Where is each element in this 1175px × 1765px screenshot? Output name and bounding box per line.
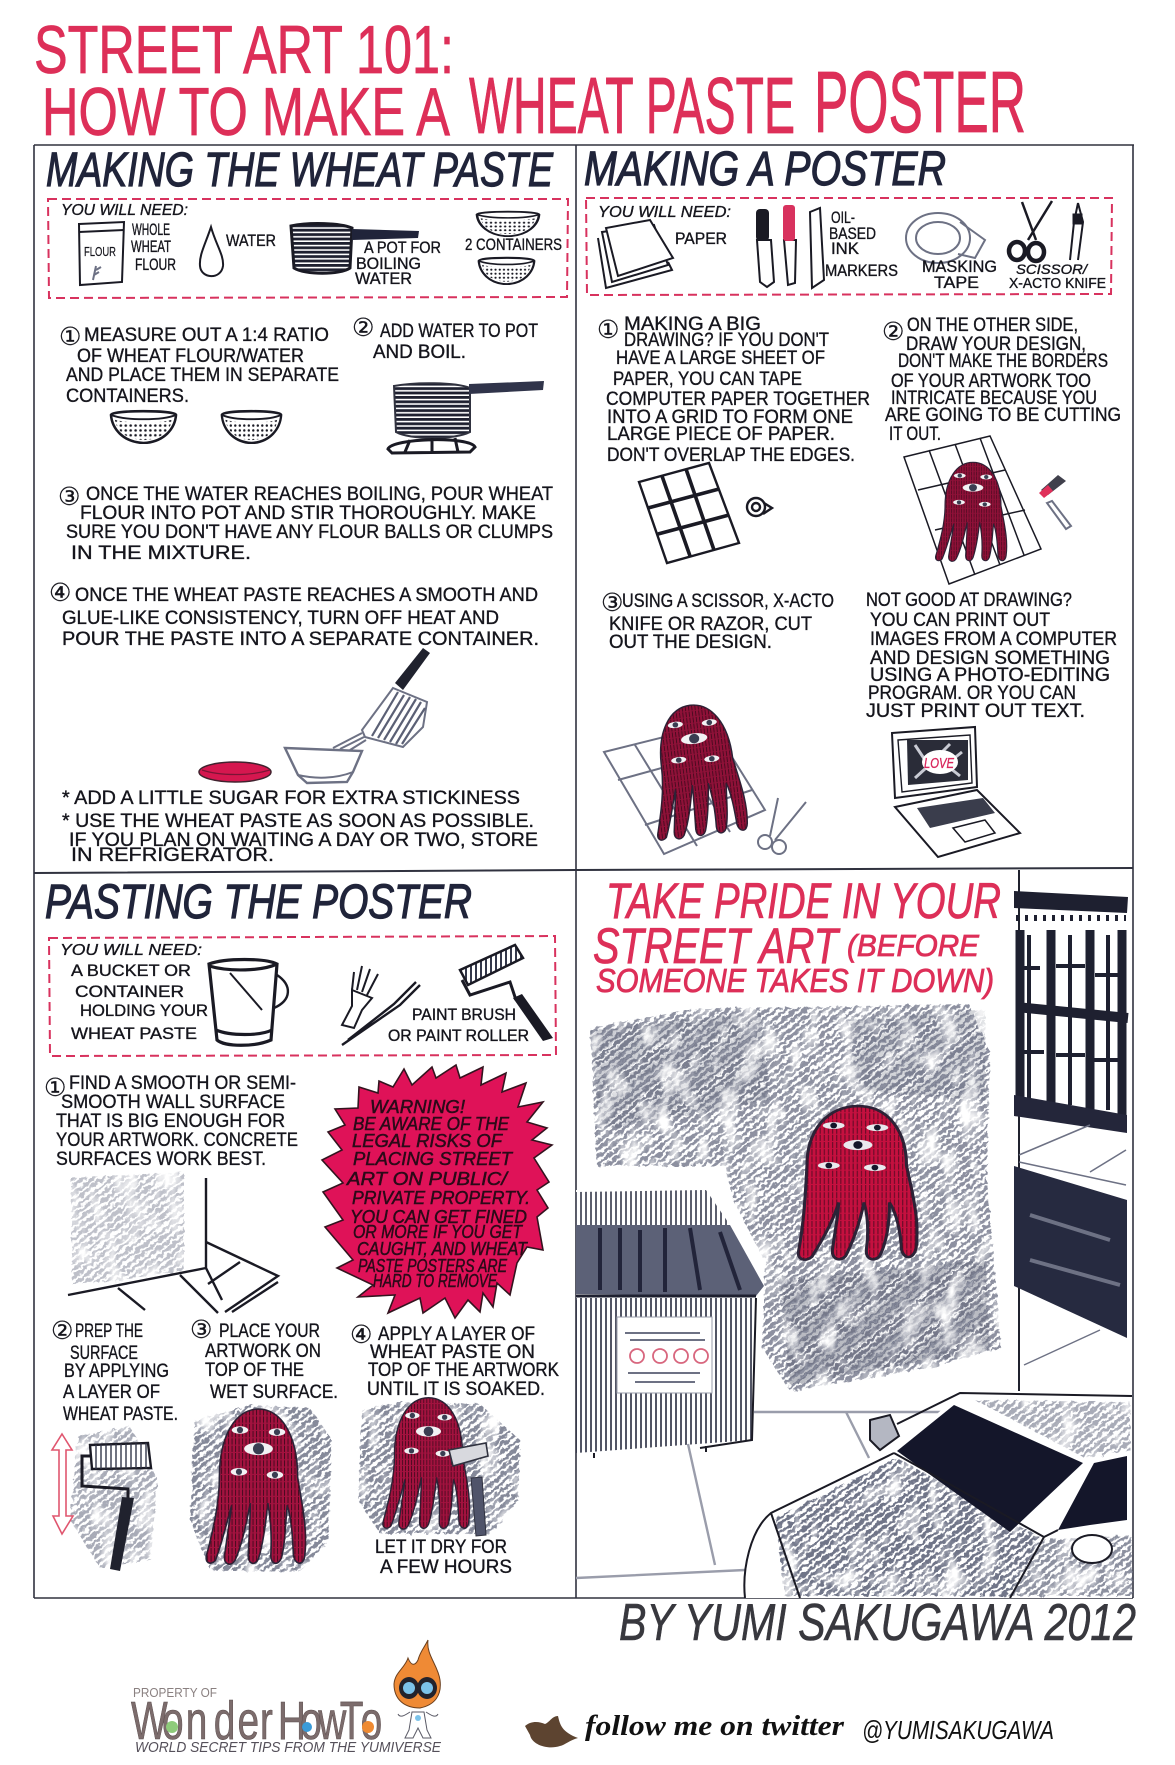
- step 2 poster: ②: [882, 317, 904, 346]
- step 3 pasting: ③: [190, 1315, 212, 1344]
- supplies box: poster: SCISSOR/: [1016, 261, 1089, 277]
- logo: wonderhowto: [131, 1640, 442, 1756]
- supplies box: poster: X-ACTO KNIFE: [1009, 275, 1106, 292]
- street octopus poster: [798, 1106, 917, 1260]
- icon: paper: [598, 220, 673, 288]
- warning starburst: OR MORE IF YOU GET: [353, 1221, 523, 1242]
- supplies box: pasting: HOLDING YOUR: [80, 1002, 208, 1020]
- illustration: design on grid: [904, 436, 1071, 584]
- step 1 poster: COMPUTER PAPER TOGETHER: [606, 389, 870, 410]
- illustration: wall corner: [68, 1172, 278, 1313]
- step 4: ④: [49, 578, 71, 607]
- street lines: [576, 1412, 1000, 1578]
- title: WHEAT PASTE: [469, 61, 795, 150]
- heading: making a poster: MAKING A POSTER: [584, 143, 946, 196]
- warning starburst: CAUGHT, AND WHEAT: [357, 1238, 528, 1259]
- tip: not good at drawing: [866, 590, 1117, 857]
- warning starburst: ART ON PUBLIC/: [346, 1168, 509, 1189]
- heading: take pride in your street art: STREET ART: [593, 918, 841, 974]
- step 2: ②: [352, 313, 374, 342]
- step 1: MEASURE OUT A 1:4 RATIO: [84, 325, 329, 346]
- notes: IN REFRIGERATOR.: [71, 845, 274, 866]
- heading: pasting the poster: PASTING THE POSTER: [45, 876, 472, 929]
- logo: wonderhowto: PROPERTY OF: [133, 1685, 217, 1700]
- title: POSTER: [814, 54, 1026, 151]
- icon: bowls: [111, 411, 281, 443]
- step 1 poster: DRAWING? IF YOU DON'T: [624, 330, 829, 351]
- supplies box: poster: [586, 198, 1112, 295]
- step 4 pasting: APPLY A LAYER OF: [378, 1324, 535, 1345]
- step 3 poster: ③: [601, 588, 623, 617]
- supplies box: poster: OIL-: [831, 209, 855, 227]
- icon: laptop with love poster: LOVE: [924, 755, 955, 772]
- step 2: ADD WATER TO POT: [380, 321, 538, 342]
- step 4 pasting: UNTIL IT IS SOAKED.: [367, 1379, 545, 1400]
- panel: street scene: [576, 870, 1136, 1652]
- tip: not good at drawing: JUST PRINT OUT TEXT.: [866, 701, 1085, 722]
- step 1 pasting: SURFACES WORK BEST.: [56, 1149, 266, 1170]
- icon: red plate: [199, 762, 271, 782]
- illustration: taped paper grid: [639, 463, 772, 563]
- supplies box: poster: MARKERS: [825, 262, 898, 280]
- logo: wonderhowto: WonderHowTo: [131, 1690, 382, 1750]
- step 2 poster: OF YOUR ARTWORK TOO: [891, 371, 1091, 392]
- step 4: [49, 578, 539, 650]
- icon: markers: [756, 205, 824, 288]
- heading: making the wheat paste: MAKING THE WHEAT PASTE: [46, 144, 554, 197]
- step 2: AND BOIL.: [373, 342, 466, 363]
- notes: [62, 788, 538, 866]
- step 1 pasting: [44, 1073, 298, 1313]
- icon: two containers: [477, 212, 539, 284]
- step 2 poster: IT OUT.: [889, 424, 941, 445]
- step 3 poster: USING A SCISSOR, X-ACTO: [622, 591, 834, 612]
- supplies box: pasting: OR PAINT ROLLER: [388, 1027, 529, 1045]
- step 1 poster: HAVE A LARGE SHEET OF: [616, 348, 825, 369]
- supplies box: wheat paste: BOILING: [356, 255, 421, 273]
- step 3: IN THE MIXTURE.: [71, 543, 251, 564]
- step 1 pasting: THAT IS BIG ENOUGH FOR: [56, 1111, 285, 1132]
- step 4: GLUE-LIKE CONSISTENCY, TURN OFF HEAT AND: [62, 608, 499, 629]
- icon: masking tape: [906, 213, 985, 263]
- warning starburst: PASTE POSTERS ARE: [358, 1255, 508, 1276]
- icon: laptop with love poster: [892, 727, 1020, 857]
- supplies box: poster: MASKING: [922, 258, 997, 276]
- step 1 poster: PAPER, YOU CAN TAPE: [613, 369, 802, 390]
- supplies box: wheat paste: WHEAT: [131, 238, 171, 256]
- warning starburst: HARD TO REMOVE: [373, 1270, 497, 1291]
- scribbled wall texture: [590, 1004, 1001, 1391]
- title: STREET ART 101:: [34, 12, 454, 88]
- step 3: SURE YOU DON'T HAVE ANY FLOUR BALLS OR CLUMPS: [66, 522, 553, 543]
- step 2 pasting: ②: [51, 1316, 73, 1345]
- supplies box: pasting: PAINT BRUSH: [412, 1006, 516, 1024]
- logo coloured letter centres: [166, 1721, 374, 1733]
- supplies box: poster: YOU WILL NEED:: [598, 204, 731, 221]
- step 1 poster: [597, 314, 870, 563]
- step 1 poster: LARGE PIECE OF PAPER.: [607, 424, 835, 445]
- step 4 pasting: [350, 1320, 559, 1578]
- supplies box: wheat paste: [48, 199, 568, 298]
- notes: IF YOU PLAN ON WAITING A DAY OR TWO, STORE: [69, 830, 538, 851]
- supplies box: wheat paste: YOU WILL NEED:: [61, 202, 188, 219]
- step 1 poster: INTO A GRID TO FORM ONE: [607, 407, 853, 428]
- illustration: pasting over poster: [358, 1398, 520, 1536]
- dumpster: [576, 1190, 765, 1458]
- step 1: CONTAINERS.: [66, 386, 189, 407]
- step 2 pasting: [51, 1316, 178, 1571]
- icon: paint roller: [460, 945, 553, 1041]
- step 2 poster: INTRICATE BECAUSE YOU: [891, 388, 1097, 409]
- logo: wonderhowto: WORLD SECRET TIPS FROM THE YUMIVERSE: [135, 1739, 442, 1756]
- heading: take pride in your street art: SOMEONE TAKES IT DOWN): [596, 962, 994, 999]
- supplies box: wheat paste: WATER: [355, 270, 412, 288]
- supplies box: wheat paste: 2 CONTAINERS: [465, 236, 562, 254]
- icon: markers: [1039, 475, 1071, 529]
- step 4 pasting: A FEW HOURS: [380, 1557, 512, 1578]
- icon: scissors and knife: [1009, 201, 1083, 261]
- step 4 pasting: WHEAT PASTE ON: [370, 1342, 535, 1363]
- supplies box: poster: TAPE: [934, 274, 979, 292]
- supplies box: poster: BASED: [829, 225, 876, 243]
- step 2 pasting: WHEAT PASTE.: [63, 1404, 178, 1425]
- step 2 poster: DON'T MAKE THE BORDERS: [898, 351, 1108, 372]
- icon: pot: [291, 224, 419, 273]
- illustration: poster on wet wall: [190, 1405, 332, 1572]
- step 3 poster: KNIFE OR RAZOR, CUT: [609, 614, 812, 635]
- twitter follow: @YUMISAKUGAWA: [862, 1715, 1054, 1745]
- title: HOW TO MAKE A: [42, 74, 450, 150]
- supplies box: poster: INK: [831, 240, 859, 258]
- step 1 poster: MAKING A BIG: [624, 314, 761, 335]
- step 2 pasting: BY APPLYING: [64, 1361, 169, 1382]
- step 3 pasting: WET SURFACE.: [210, 1382, 338, 1403]
- tip: not good at drawing: PROGRAM. OR YOU CAN: [868, 683, 1076, 704]
- step 1: ①: [59, 322, 81, 351]
- step 1 pasting: SMOOTH WALL SURFACE: [61, 1092, 285, 1113]
- icon: water drop: [200, 227, 223, 276]
- step 2 poster: ON THE OTHER SIDE,: [907, 315, 1078, 336]
- supplies box: wheat paste: A POT FOR: [364, 239, 441, 257]
- step 1 pasting: YOUR ARTWORK. CONCRETE: [56, 1130, 298, 1151]
- illustration: pot pouring paste into bowl: [199, 648, 430, 783]
- comic panel frame grid: [34, 145, 1134, 1598]
- tip: not good at drawing: USING A PHOTO-EDITING: [870, 665, 1110, 686]
- warning starburst: WARNING!: [370, 1096, 465, 1117]
- sidewalk ledge and dark wall: [1014, 1125, 1127, 1365]
- icon: flour bag: FLOUR: [84, 244, 116, 259]
- illustration: cutting out the design: [604, 700, 806, 854]
- step 3 pasting: PLACE YOUR: [219, 1321, 320, 1342]
- supplies box: pasting: A BUCKET OR: [71, 962, 191, 980]
- heading: take pride in your street art: (BEFORE: [847, 928, 979, 963]
- warning starburst: PLACING STREET: [353, 1148, 514, 1169]
- step 2 pasting: A LAYER OF: [63, 1382, 160, 1403]
- warning starburst: BE AWARE OF THE: [353, 1113, 510, 1134]
- step 2 pasting: SURFACE: [70, 1343, 138, 1364]
- tip: not good at drawing: IMAGES FROM A COMPUTER: [870, 629, 1117, 650]
- supplies box: wheat paste: WATER: [226, 232, 276, 250]
- supplies box: pasting: CONTAINER: [75, 983, 184, 1001]
- step 1 poster: ①: [597, 315, 619, 344]
- step 3 pasting: [190, 1315, 338, 1572]
- step 3: [58, 482, 553, 564]
- step 3 pasting: TOP OF THE: [205, 1360, 304, 1381]
- step 2: [352, 313, 544, 453]
- supplies box: wheat paste: WHOLE: [132, 221, 170, 239]
- step 3: ③: [58, 482, 80, 511]
- notes: * ADD A LITTLE SUGAR FOR EXTRA STICKINESS: [62, 788, 520, 809]
- supplies box: poster: PAPER: [675, 230, 727, 248]
- warning starburst: [322, 1065, 552, 1318]
- step 1 pasting: FIND A SMOOTH OR SEMI-: [69, 1073, 296, 1094]
- step 4 pasting: TOP OF THE ARTWORK: [368, 1360, 559, 1381]
- step 4 pasting: ④: [350, 1320, 372, 1349]
- step 2 poster: ARE GOING TO BE CUTTING: [885, 405, 1121, 426]
- panel: making a poster: [584, 143, 1121, 857]
- icon: flour bag: [79, 222, 124, 285]
- supplies box: pasting: [49, 936, 556, 1056]
- step 2 poster: [882, 315, 1121, 584]
- icon: brown bird: [525, 1716, 578, 1747]
- heading: take pride in your street art: [593, 873, 1001, 999]
- panel: making the wheat paste: [46, 144, 568, 866]
- step 3 poster: OUT THE DESIGN.: [609, 632, 772, 653]
- step 2 poster: DRAW YOUR DESIGN,: [906, 334, 1086, 355]
- step 1 pasting: ①: [44, 1073, 66, 1102]
- icon: flame mascot: [394, 1640, 440, 1738]
- warning starburst: YOU CAN GET FINED: [350, 1206, 527, 1227]
- icon: bucket: [209, 960, 288, 1045]
- icon: scissors: [758, 798, 806, 854]
- step 3 poster: [601, 588, 834, 854]
- step 4 pasting: LET IT DRY FOR: [375, 1537, 507, 1558]
- step 3: ONCE THE WATER REACHES BOILING, POUR WHEAT: [86, 484, 553, 505]
- step 1: AND PLACE THEM IN SEPARATE: [66, 365, 339, 386]
- panel: pasting the poster: [44, 876, 559, 1578]
- supplies box: pasting: YOU WILL NEED:: [60, 942, 202, 959]
- tip: not good at drawing: NOT GOOD AT DRAWING?: [866, 590, 1072, 611]
- car: [744, 1393, 1132, 1598]
- heading: take pride in your street art: TAKE PRIDE IN YOUR: [606, 873, 1001, 929]
- supplies box: wheat paste: FLOUR: [135, 256, 176, 274]
- tip: not good at drawing: AND DESIGN SOMETHING: [870, 648, 1110, 669]
- step 1: [59, 322, 339, 443]
- notes: * USE THE WHEAT PASTE AS SOON AS POSSIBLE.: [62, 811, 534, 832]
- illustration: roller with arrow: [52, 1426, 158, 1571]
- dumpster notice sign: [617, 1317, 712, 1393]
- step 3 pasting: ARTWORK ON: [205, 1341, 321, 1362]
- twitter follow: [525, 1711, 1054, 1747]
- step 4: POUR THE PASTE INTO A SEPARATE CONTAINER.: [62, 629, 539, 650]
- step 1: OF WHEAT FLOUR/WATER: [77, 346, 304, 367]
- twitter follow: follow me on twitter: [585, 1711, 845, 1742]
- step 1 poster: DON'T OVERLAP THE EDGES.: [607, 445, 855, 466]
- warning starburst: PRIVATE PROPERTY.: [352, 1187, 530, 1208]
- step 4: ONCE THE WHEAT PASTE REACHES A SMOOTH AND: [75, 585, 538, 606]
- icon: paint brush: [342, 966, 420, 1045]
- icon: pot on burner: [388, 381, 544, 453]
- warning starburst: LEGAL RISKS OF: [352, 1130, 504, 1151]
- supplies box: pasting: WHEAT PASTE: [71, 1025, 197, 1043]
- tip: not good at drawing: YOU CAN PRINT OUT: [870, 610, 1050, 631]
- title: [34, 12, 1026, 151]
- step 3: FLOUR INTO POT AND STIR THOROUGHLY. MAKE: [80, 503, 536, 524]
- building windows: [1014, 870, 1128, 1391]
- step 2 pasting: PREP THE: [75, 1321, 143, 1342]
